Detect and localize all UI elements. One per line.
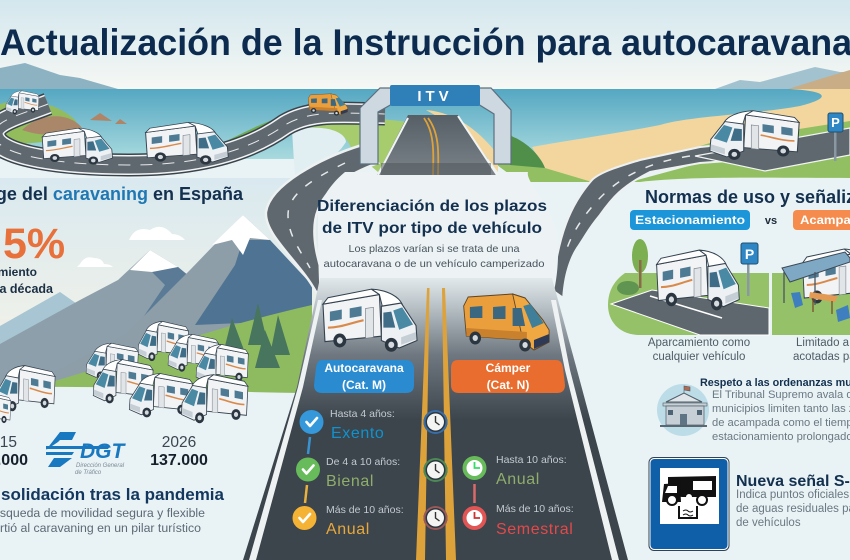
logo: DGT: de Tráfico [75,470,102,476]
icon: parking sign top: P [831,115,840,130]
badge: autocaravana: Autocaravana [324,361,404,375]
señal body: de vehículos [736,517,801,529]
logo: DGT: Dirección General [76,463,125,469]
timeline autocaravana: Más de 10 años: [326,504,404,516]
ITV road under arch [377,115,497,175]
caption: estacionamiento: Aparcamiento como [648,337,750,349]
ordenanzas body [712,389,850,443]
logo: DGT: DGT [80,440,126,463]
panel: diferenciación de plazos [292,198,574,538]
2026 value: 2026 [162,434,196,451]
panel: auge del caravaning [0,184,248,535]
description: Los plazos varían si se trata de una [348,243,520,255]
heading [317,198,547,237]
illustration: parking: P [745,246,754,262]
sky and title band [0,0,850,90]
timeline autocaravana: Hasta 4 años: [330,408,395,420]
ITV arch [360,85,511,164]
motorhome fleet [0,321,248,425]
icon: autocaravana [323,289,417,352]
caption: estacionamiento: cualquier vehículo [653,351,745,363]
badge: autocaravana: (Cat. M) [342,378,386,392]
description: autocaravana o de un vehículo camperizado [324,258,545,270]
icon: camper van [464,294,549,352]
left lower sky [0,178,320,388]
señal body [736,489,850,529]
left curving road [266,145,378,292]
heading: de ITV por tipo de vehículo [322,220,542,237]
caption: acampada [793,337,850,363]
icon: parking sign top [828,113,843,161]
2026 value: 137.000 [150,452,208,469]
timeline autocaravana: De 4 a 10 años: [326,456,400,468]
timeline camper: Anual [496,471,540,488]
ITV arch: ITV [417,88,453,105]
timeline camper [462,454,574,538]
badge: camper [451,360,565,393]
left lower panel [0,387,300,560]
badge: camper: Cámper [486,361,531,375]
ordenanzas body: estacionamiento prolongado [712,431,850,443]
right curving road [552,140,770,300]
icon: señal S-125 [649,458,729,550]
illustration: parking [608,239,769,335]
timeline camper: Hasta 10 años: [496,454,567,466]
timeline camper: Semestral [496,521,573,538]
timeline autocaravana: Bienal [326,473,374,490]
badge: autocaravana [314,360,414,393]
badge: acampada [793,210,850,230]
coastal landscape [0,63,850,182]
central road [243,278,628,560]
badge: estacionamiento: Estacionamiento [635,213,745,227]
timeline camper: Más de 10 años: [496,503,574,515]
right parking asphalt [695,128,850,171]
2015 value [0,434,28,469]
panel: normas de uso [608,187,850,550]
top road vehicles [6,91,799,165]
body text [0,506,205,535]
vs: vs [765,215,777,227]
timeline autocaravana: Anual [326,521,370,538]
right panel [562,178,850,560]
timeline autocaravana [292,408,404,538]
top winding road [0,104,385,165]
description [324,243,545,270]
mountains [0,215,312,395]
logo: DGT [46,432,126,476]
heading: Diferenciación de los plazos [317,198,547,215]
caption: estacionamiento [648,337,750,363]
2026 value [150,434,208,469]
badge: estacionamiento [630,210,750,230]
badge: camper: (Cat. N) [487,378,529,392]
illustration: acampada [772,249,850,335]
big stat: 5% [3,220,65,268]
icons: central clocks [424,410,448,530]
timeline autocaravana: Exento [331,425,384,442]
grass and trees [40,303,312,393]
icon: town hall [657,384,709,436]
center panel [318,172,558,300]
